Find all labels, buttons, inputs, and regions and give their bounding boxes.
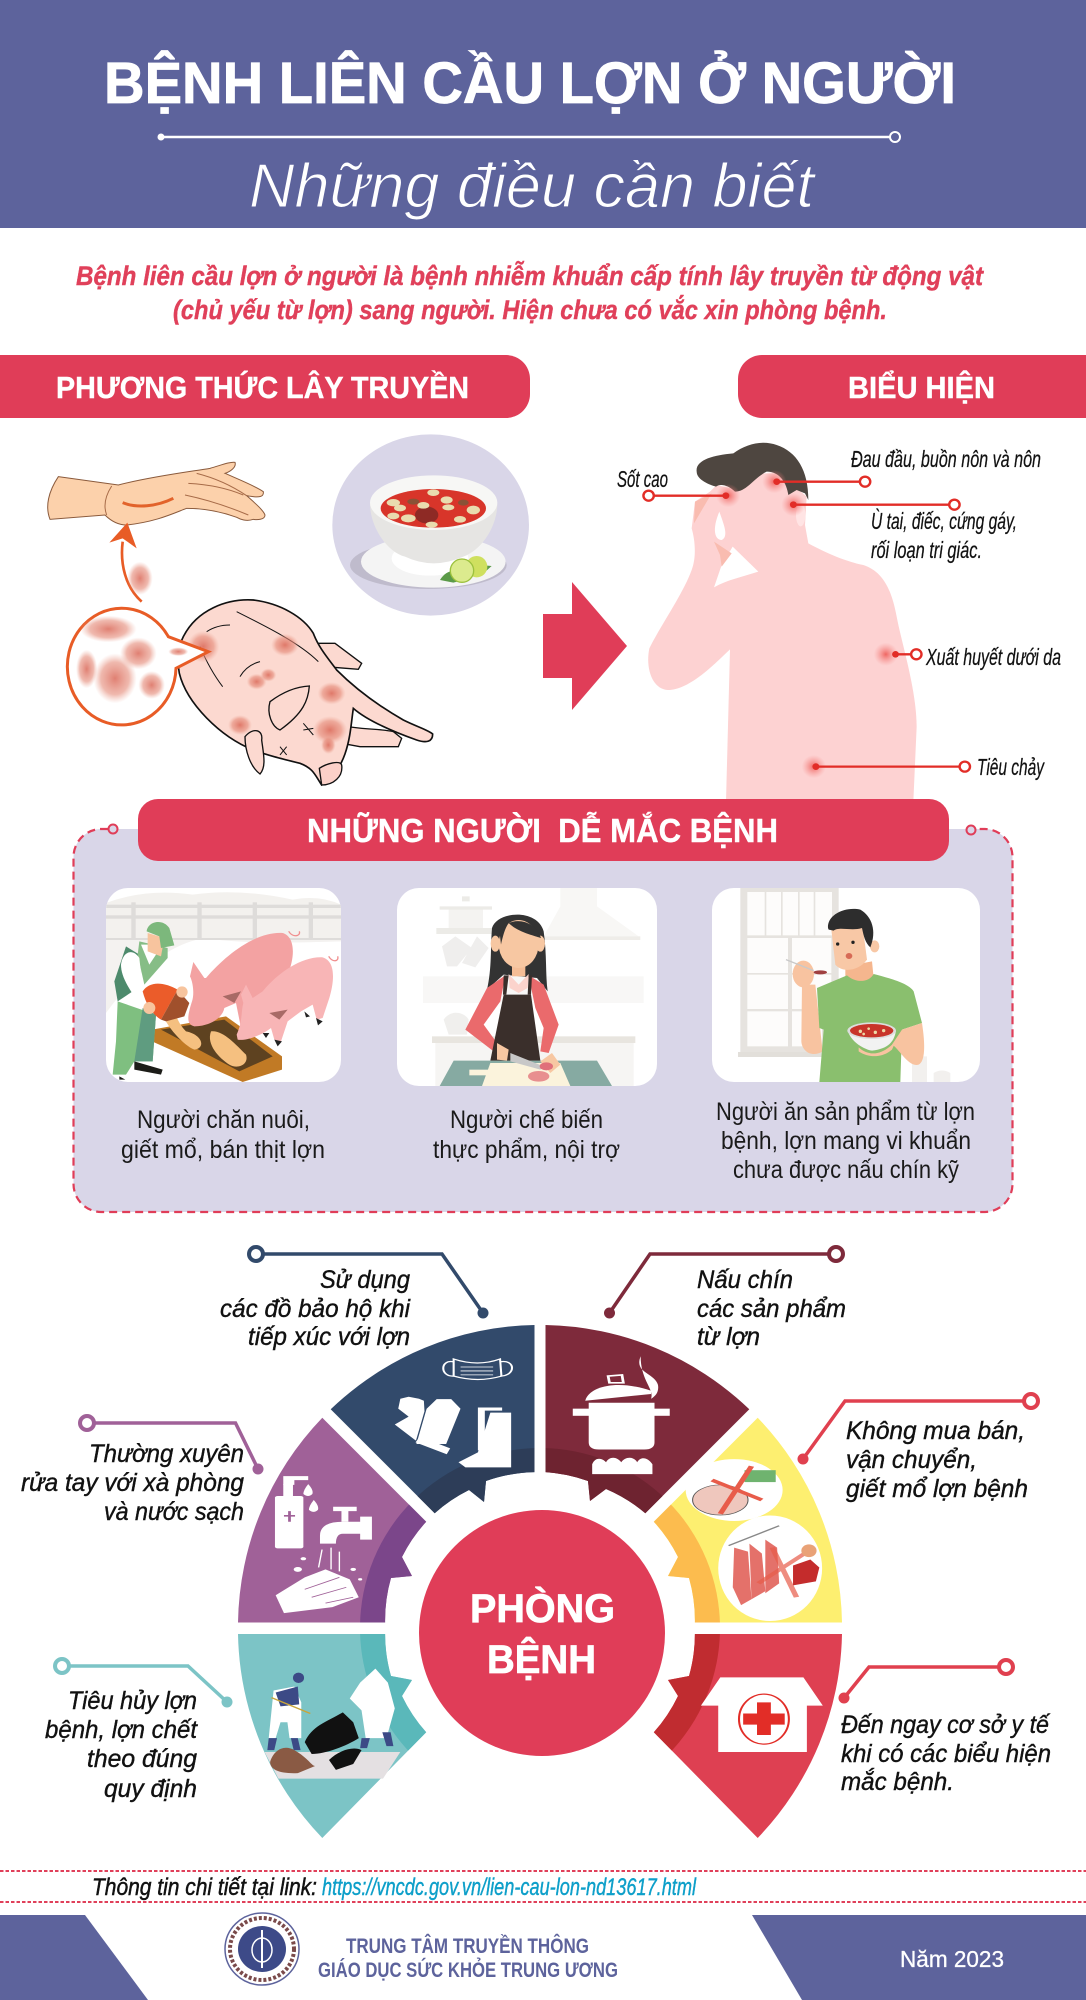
captions: Người chăn nuôi, xyxy=(137,1106,310,1134)
feed xyxy=(166,1003,201,1050)
callout: seek care: mắc bệnh. xyxy=(841,1767,954,1796)
arrow: pig to hand xyxy=(109,523,142,602)
segment: cook xyxy=(546,1325,750,1514)
link strip: https://vncdc.gov.vn/lien-cau-lon-nd13617.html xyxy=(322,1874,697,1901)
hair xyxy=(487,915,548,991)
icon: dead pig xyxy=(178,600,433,785)
footer organisation name: GIÁO DỤC SỨC KHỎE TRUNG ƯƠNG xyxy=(318,1958,618,1982)
arm xyxy=(801,985,823,1054)
segment: no trade xyxy=(654,1418,842,1622)
segment: wash hands xyxy=(238,1418,426,1622)
farmer torso xyxy=(114,946,139,1001)
symptom labels: rối loạn tri giác. xyxy=(871,537,982,563)
callout: skin lesions xyxy=(67,608,208,725)
panel heading xyxy=(138,799,949,861)
trough xyxy=(152,1016,282,1082)
shirt xyxy=(817,974,922,1082)
heading: transmission xyxy=(0,355,530,418)
captions: chưa được nấu chín kỹ xyxy=(733,1156,959,1184)
segment: disposal xyxy=(238,1634,426,1838)
panel dashed border xyxy=(73,829,1013,1212)
header band xyxy=(0,0,1086,228)
callout: cook thoroughly: các sản phẩm xyxy=(697,1295,846,1323)
plus xyxy=(284,1511,295,1522)
callout: no trade xyxy=(798,1394,1038,1503)
callout: no trade: Không mua bán, xyxy=(846,1417,1025,1445)
callout: no trade: vận chuyển, xyxy=(846,1446,977,1474)
captions: Người chế biến xyxy=(450,1106,603,1134)
farmer legs xyxy=(113,1001,156,1075)
icon: bottle and faucet xyxy=(275,1476,372,1548)
callout: seek care xyxy=(838,1660,1051,1796)
icon: disposal xyxy=(265,1669,400,1779)
callout: wash hands: Thường xuyên xyxy=(89,1440,244,1468)
panel: vulnerable people xyxy=(73,799,1013,1212)
callout: cook thoroughly: từ lợn xyxy=(697,1323,760,1351)
card: food preparer xyxy=(397,888,657,1086)
callout: wash hands: và nước sạch xyxy=(104,1498,244,1526)
symptoms figure xyxy=(648,443,917,802)
icon: food bowl in circle xyxy=(332,434,529,616)
link strip: Thông tin chi tiết tại link: xyxy=(92,1874,317,1901)
callout: wash hands: rửa tay với xà phòng xyxy=(21,1469,244,1497)
callout: seek care: Đến ngay cơ sở y tế xyxy=(841,1711,1051,1739)
segment: protective gear xyxy=(330,1325,534,1514)
gap between arm and neck xyxy=(714,547,758,587)
centre circle: PHÒNG xyxy=(470,1585,615,1631)
link strip xyxy=(0,1871,1086,1902)
heading: transmission: PHƯƠNG THỨC LÂY TRUYỀN xyxy=(56,369,469,405)
apron xyxy=(490,995,540,1061)
footer year: Năm 2023 xyxy=(900,1946,1004,1972)
icon: ministry logo xyxy=(225,1913,299,1985)
icon: no pig sale xyxy=(686,1459,783,1521)
ear highlight xyxy=(796,504,805,526)
card: farmer xyxy=(106,888,341,1082)
icon: no butchery xyxy=(718,1515,822,1621)
intro text: Bệnh liên cầu lợn ở người là bệnh nhiễm khuẩn cấp tính lây truyền từ động vật xyxy=(76,260,984,291)
callout: protective gear: các đồ bảo hộ khi xyxy=(220,1295,411,1323)
blotch xyxy=(127,562,153,595)
callout: protective gear: Sử dụng xyxy=(320,1266,410,1294)
sweater xyxy=(465,975,559,1053)
callout: disposal xyxy=(45,1659,232,1803)
person silhouette xyxy=(648,473,917,802)
heading: symptoms xyxy=(738,355,1086,418)
symptom markers xyxy=(643,470,970,778)
symptom labels xyxy=(617,446,1061,780)
callout: disposal: Tiêu hủy lợn xyxy=(68,1687,197,1715)
icon: gloves xyxy=(395,1397,461,1454)
transmission illustrations xyxy=(48,434,529,785)
captions: thực phẩm, nội trợ xyxy=(433,1136,620,1164)
captions: Người ăn sản phẩm từ lợn xyxy=(716,1098,975,1126)
prevention wheel xyxy=(230,1320,850,1845)
water stream xyxy=(319,1548,339,1571)
table xyxy=(440,1061,612,1086)
pig front xyxy=(237,957,333,1041)
callout: no trade: giết mổ lợn bệnh xyxy=(846,1475,1028,1503)
neck and head xyxy=(845,961,874,983)
footer right shape xyxy=(752,1915,1086,2000)
icon: boots xyxy=(459,1407,511,1467)
centre circle xyxy=(419,1510,665,1756)
symptom labels: Ù tai, điếc, cứng gáy, xyxy=(871,508,1017,534)
footer organisation name: TRUNG TÂM TRUYỀN THÔNG xyxy=(346,1934,589,1958)
pig back xyxy=(188,933,293,1028)
hand shade xyxy=(694,493,732,567)
callout: disposal: bệnh, lợn chết xyxy=(45,1716,198,1744)
title divider xyxy=(158,132,900,142)
callout: wash hands xyxy=(21,1416,264,1526)
callout: disposal: theo đúng xyxy=(87,1745,197,1773)
decorative rings xyxy=(108,824,976,834)
title: BỆNH LIÊN CẦU LỢN Ở NGƯỜI xyxy=(104,51,956,116)
callout: cook thoroughly xyxy=(604,1247,846,1351)
callout: protective gear: tiếp xúc với lợn xyxy=(248,1323,410,1351)
subtitle: Những điều cần biết xyxy=(249,152,817,221)
callout: disposal: quy định xyxy=(104,1775,197,1803)
icon: hands xyxy=(276,1557,362,1613)
bowl xyxy=(848,1031,896,1051)
wheel icons xyxy=(265,1356,823,1779)
gap at ear xyxy=(715,512,725,540)
segment: seek care xyxy=(654,1634,842,1838)
card: eater xyxy=(712,888,980,1082)
callout: protective gear xyxy=(220,1247,488,1351)
hair xyxy=(697,443,808,500)
symptom labels: Tiêu chảy xyxy=(977,754,1045,780)
intro text xyxy=(76,260,984,325)
captions xyxy=(121,1098,975,1184)
footer organisation name xyxy=(318,1934,618,1982)
captions: giết mổ, bán thịt lợn xyxy=(121,1136,325,1164)
hand lines xyxy=(305,1577,353,1603)
symptom labels: Sốt cao xyxy=(617,466,668,492)
heading: symptoms: BIỂU HIỆN xyxy=(848,369,995,405)
icon: clinic xyxy=(701,1677,823,1752)
captions: bệnh, lợn mang vi khuẩn xyxy=(721,1127,971,1155)
callout: seek care: khi có các biểu hiện xyxy=(841,1740,1051,1768)
icon: pot xyxy=(573,1356,670,1474)
intro text: (chủ yếu từ lợn) sang người. Hiện chưa có vắc xin phòng bệnh. xyxy=(173,294,887,325)
footer left shape xyxy=(0,1915,148,2000)
icon: mask xyxy=(443,1359,512,1379)
centre circle: BỆNH xyxy=(487,1636,596,1682)
icon: hand with wound xyxy=(48,462,265,525)
hands and knife xyxy=(510,1053,544,1070)
panel heading: NHỮNG NGƯỜI DỄ MẮC BỆNH xyxy=(307,812,778,849)
arrow: transmission to symptoms xyxy=(543,582,627,710)
callout: cook thoroughly: Nấu chín xyxy=(697,1266,793,1294)
bucket xyxy=(143,984,178,1020)
